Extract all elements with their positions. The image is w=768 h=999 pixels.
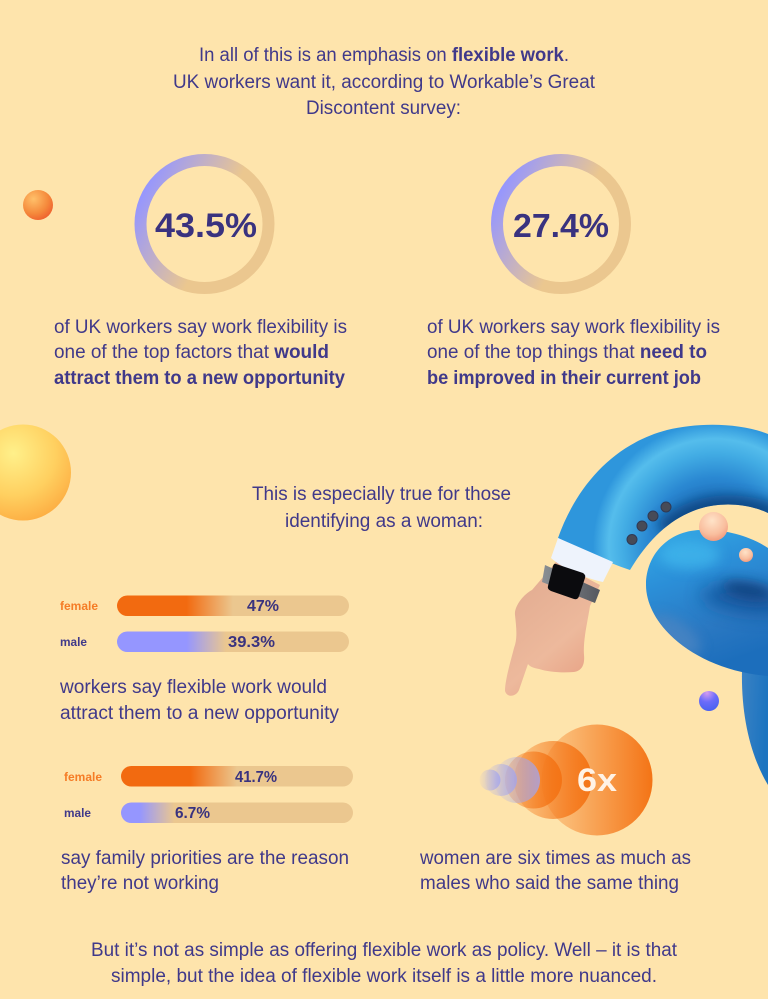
- ring stat: 27.4%: 27.4%: [513, 207, 609, 244]
- text: need to be improved: be improved in their current job: [427, 368, 701, 389]
- icon: blue sphere: [699, 691, 719, 711]
- male bar 39.3%: [60, 632, 349, 652]
- ring stat: 43.5%: [140, 160, 268, 288]
- caption: family priorities: they’re not working: [61, 873, 219, 894]
- text: attract to new opportunity: of UK workers say work flexibility is: [54, 317, 347, 338]
- female bar 41.7%: female: [64, 770, 102, 784]
- watch band: [542, 565, 600, 603]
- watch face: [548, 564, 585, 599]
- text: attract to new opportunity: one of the top factors that would: [54, 342, 329, 363]
- ring stat: 43.5%: 43.5%: [155, 207, 257, 245]
- icon: small peach sphere: [739, 548, 753, 562]
- caption: flexible work: [59, 677, 339, 724]
- intro text: UK workers want it, according to Workable’s Great: [173, 72, 596, 93]
- sleeve: [550, 420, 768, 575]
- text: attract to new opportunity: attract them to a new opportunity: [54, 368, 345, 389]
- male bar 6.7%: male: [64, 806, 91, 820]
- shirt cuff: [551, 538, 613, 582]
- icon: small red sphere: [23, 190, 53, 220]
- closing text: [91, 940, 678, 987]
- male bar 39.3%: 39.3%: [228, 634, 275, 651]
- intro text: In all of this is an emphasis on flexible work.: [199, 45, 569, 66]
- sleeve buttons: [627, 502, 671, 544]
- text: need to be improved: of UK workers say work flexibility is: [427, 317, 720, 338]
- heading: true for women: identifying as a woman:: [285, 511, 483, 532]
- lower blue tube: [742, 660, 768, 785]
- male bar 6.7%: [64, 802, 353, 823]
- icon: peach sphere: [699, 512, 728, 541]
- text: attract to new opportunity: [54, 317, 347, 389]
- heading: true for women: This is especially true for those: [252, 484, 511, 505]
- blue blob: [646, 530, 768, 676]
- closing text: simple, but the idea of flexible work itself is a little more nuanced.: [111, 966, 657, 987]
- graphic: 6x concentric circles: [480, 724, 652, 836]
- caption: family priorities: [61, 848, 349, 894]
- female bar 41.7%: 41.7%: [235, 769, 277, 786]
- bar chart: flexible work: [60, 596, 349, 652]
- graphic: 6x concentric circles: 6x: [577, 762, 617, 798]
- hand: [505, 562, 600, 696]
- closing text: But it’s not as simple as offering flexible work as policy. Well – it is that: [91, 940, 678, 961]
- icon: large yellow sphere: [0, 424, 71, 520]
- male bar 6.7%: 6.7%: [175, 805, 210, 822]
- caption: flexible work: workers say flexible work would: [59, 677, 327, 698]
- caption: family priorities: say family priorities are the reason: [61, 848, 349, 869]
- female bar 47%: [60, 596, 349, 616]
- female bar 41.7%: [64, 766, 353, 786]
- caption: six times: women are six times as much as: [419, 848, 691, 869]
- female bar 47%: female: [60, 599, 98, 613]
- caption: flexible work: attract them to a new opportunity: [60, 703, 339, 724]
- male bar 39.3%: male: [60, 635, 87, 649]
- illustration: blue arm with pointing hand: [505, 420, 768, 785]
- bar chart: family priorities: [64, 766, 353, 823]
- caption: six times: males who said the same thing: [420, 873, 679, 894]
- female bar 47%: 47%: [247, 598, 279, 615]
- intro text: Discontent survey:: [306, 98, 461, 119]
- intro text: [173, 45, 596, 119]
- heading: true for women: [252, 484, 511, 532]
- text: need to be improved: [427, 317, 720, 389]
- ring stat: 27.4%: [497, 160, 625, 288]
- text: need to be improved: one of the top things that need to: [427, 342, 707, 363]
- caption: six times: [419, 848, 691, 894]
